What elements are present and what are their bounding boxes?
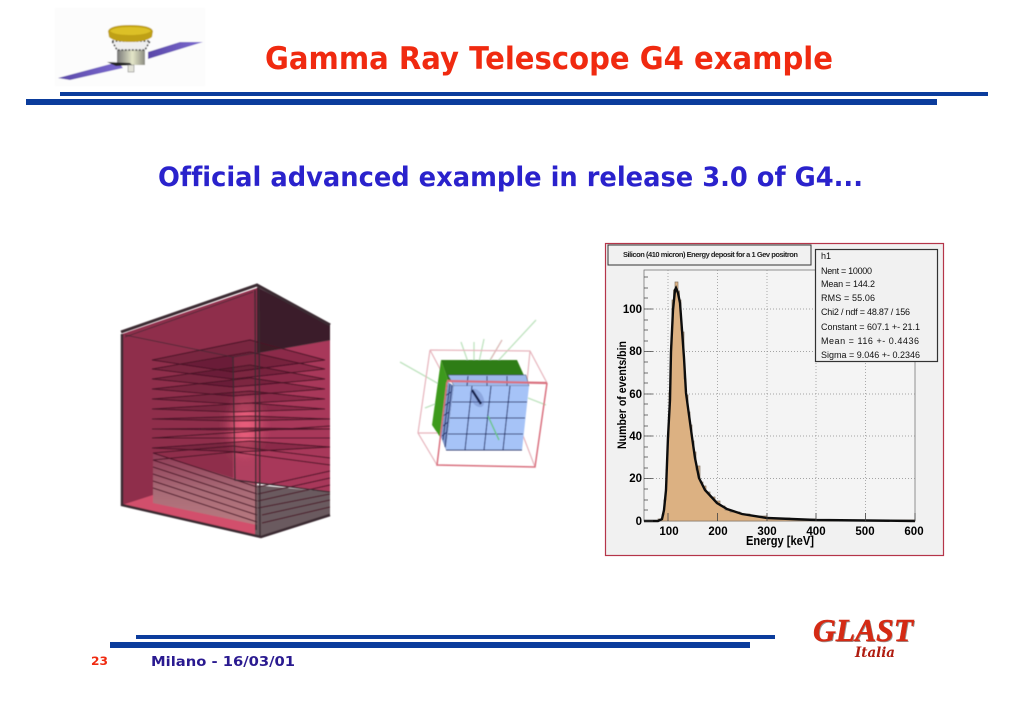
x tick labels: 100 (659, 526, 679, 538)
page number: 23 (91, 654, 108, 668)
y tick labels: 80 (629, 346, 642, 358)
particle rays (400, 320, 546, 408)
floor (122, 495, 261, 537)
statistics box: Nent = 10000 (821, 266, 872, 276)
lower tracker layers (153, 446, 330, 523)
left back wall (122, 288, 257, 505)
blue layers (448, 375, 529, 386)
fit curve (644, 288, 915, 521)
grid (644, 270, 915, 521)
y tick labels: 100 (623, 304, 642, 316)
figure: gamma ray event display (400, 320, 547, 467)
figure: telescope tracker volume (121, 285, 330, 537)
footer date: Milano - 16/03/01 (151, 654, 295, 670)
x tick labels: 500 (855, 526, 875, 538)
header rule (26, 92, 988, 105)
x tick labels: 300 (757, 526, 777, 538)
y tick labels: 20 (629, 473, 642, 485)
histogram title box: Silicon (410 micron) Energy deposit for a 1 Gev positron (623, 250, 798, 259)
axis ticks (644, 277, 915, 521)
histogram fill (658, 282, 915, 521)
shower track (467, 386, 487, 410)
logo: GLAST Italia: GLAST (813, 612, 914, 648)
statistics box: Chi2 / ndf = 48.87 / 156 (821, 307, 910, 317)
logo: GLAST Italia: Italia (854, 645, 895, 661)
statistics box: h1 (821, 251, 831, 261)
front wireframe (437, 381, 547, 467)
x axis title: Energy [keV] (746, 534, 814, 548)
y tick labels (623, 304, 642, 528)
green panel (441, 360, 526, 380)
x tick labels (659, 526, 924, 538)
y tick labels: 0 (636, 516, 642, 528)
x tick labels: 400 (806, 526, 826, 538)
statistics box: Sigma = 9.046 +- 0.2346 (821, 350, 920, 360)
right wall (233, 340, 330, 492)
tracker layers (152, 340, 330, 452)
histogram panel (606, 244, 944, 556)
calorimeter grid (446, 376, 527, 450)
x tick labels: 600 (904, 526, 924, 538)
subtitle: Official advanced example in release 3.0 of G4... (158, 162, 863, 193)
logo: GLAST Italia: GLAST (814, 613, 915, 649)
title: Gamma Ray Telescope G4 example (265, 41, 833, 77)
footer rule (110, 635, 775, 648)
side grid (441, 382, 454, 450)
back wireframe (418, 350, 547, 467)
statistics box (816, 250, 938, 362)
dark top right face (257, 287, 330, 353)
histogram title box (608, 245, 811, 265)
y tick labels: 40 (629, 431, 642, 443)
box outline (121, 285, 330, 537)
plot area (644, 270, 915, 521)
icon: satellite logo (55, 8, 205, 86)
statistics box: Constant = 607.1 +- 21.1 (821, 322, 920, 332)
y tick labels: 60 (629, 389, 642, 401)
y axis title: Number of events/bin (615, 341, 629, 449)
statistics box: Mean = 144.2 (821, 279, 875, 289)
statistics box: RMS = 55.06 (821, 293, 875, 303)
x tick labels: 200 (708, 526, 728, 538)
statistics box: Mean = 116 +- 0.4436 (821, 336, 919, 346)
